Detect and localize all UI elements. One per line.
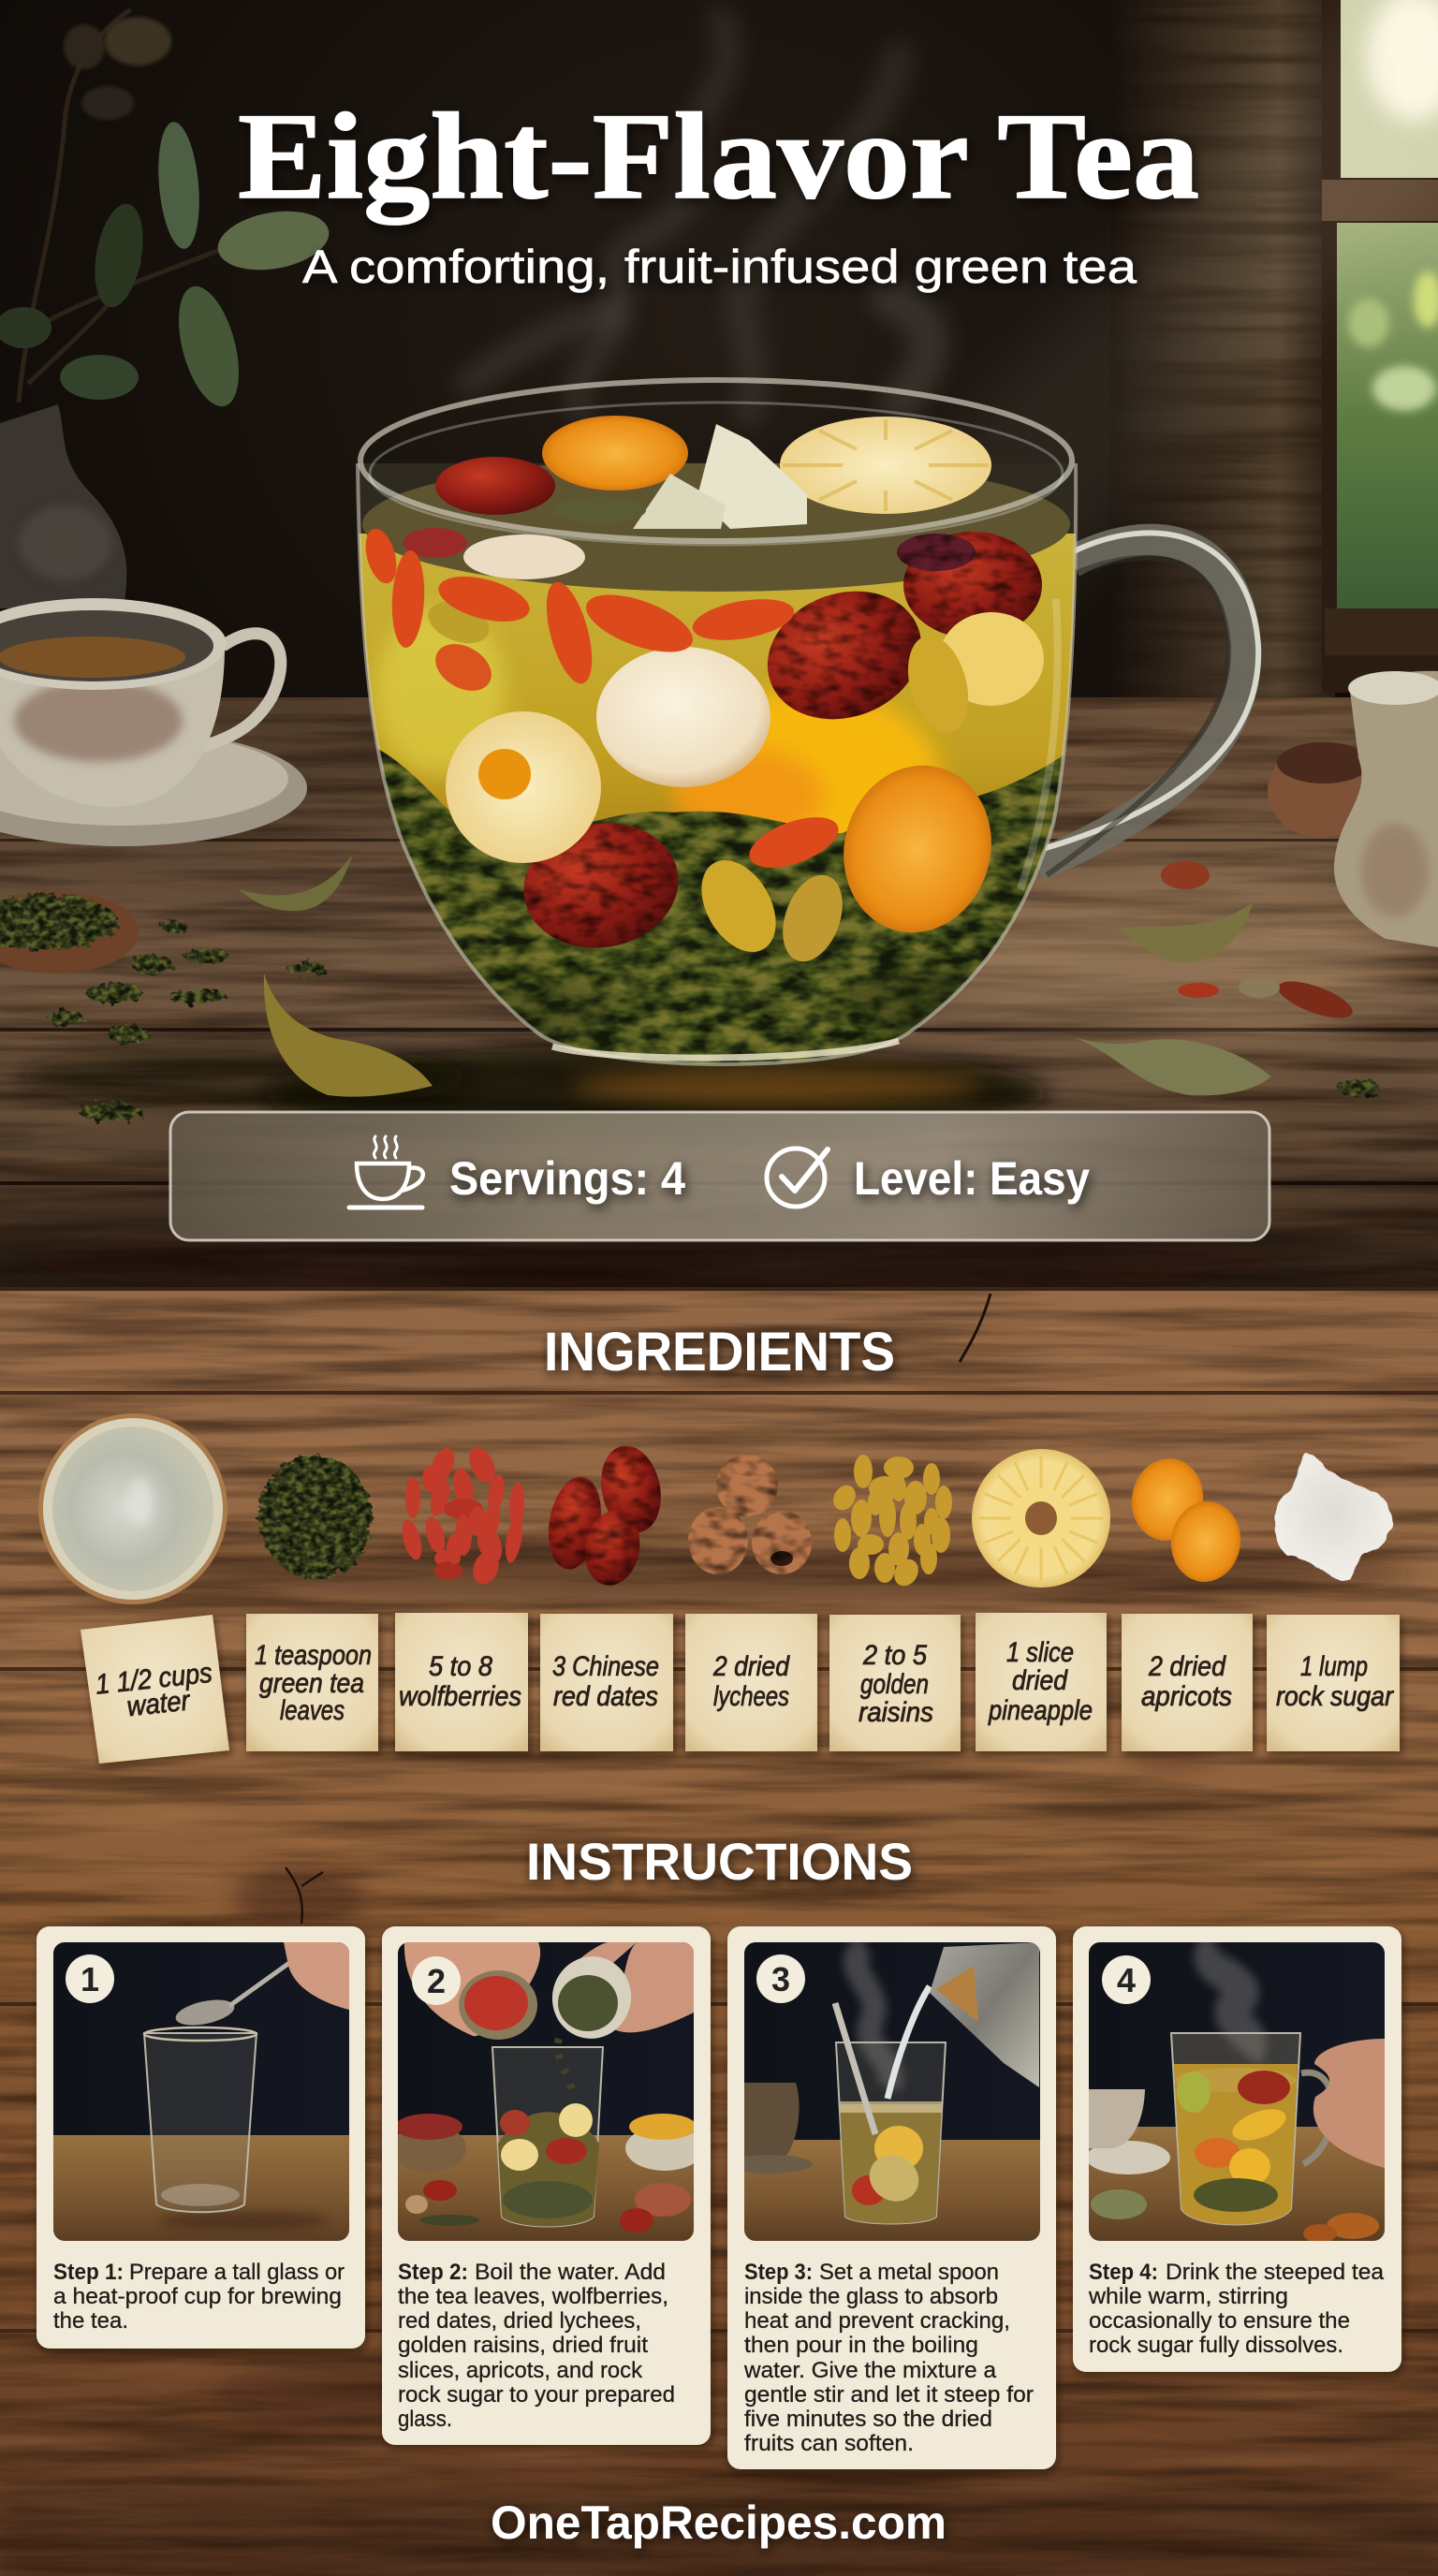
panel: step 1 — [37, 1926, 365, 2349]
wood lower background — [0, 1287, 1438, 2576]
servings and level panel — [170, 1112, 1269, 1240]
step 1 text: Prepare a tall glass or — [129, 2260, 345, 2285]
wolfberries — [360, 525, 845, 878]
step 4 text: Step 4: — [1089, 2260, 1158, 2285]
note labels — [94, 1637, 1394, 1728]
apricot — [825, 749, 1010, 949]
teacup on saucer — [0, 598, 307, 846]
note labels: apricots — [1141, 1681, 1232, 1712]
step 2 text: Boil the water. Add — [475, 2260, 666, 2285]
step 2 number — [412, 1956, 461, 2005]
step 4 text: occasionally to ensure the — [1089, 2308, 1350, 2334]
note labels: raisins — [858, 1697, 933, 1728]
ingredient row — [38, 1413, 1414, 1604]
step 4 text — [1088, 2260, 1385, 2358]
green tea leaves — [259, 1456, 372, 1579]
step 2 text: the tea leaves, wolfberries, — [398, 2284, 668, 2309]
cup body and tea — [358, 463, 1076, 1064]
note: lychees — [685, 1614, 817, 1751]
lychees — [446, 612, 1044, 863]
servings label: Servings: 4 — [449, 1152, 685, 1205]
step 1 number — [66, 1954, 114, 2003]
note labels: 1 1/2 cups — [94, 1658, 213, 1701]
step 2 text: rock sugar to your prepared — [398, 2382, 675, 2408]
golden raisins — [422, 594, 978, 970]
note labels: dried — [1012, 1665, 1068, 1696]
step 3 text: Step 3: — [744, 2260, 813, 2285]
step 3 text: five minutes so the dried — [744, 2407, 992, 2432]
panel: step 2 — [382, 1926, 711, 2445]
wolfberries — [399, 1443, 525, 1588]
step 2 text: slices, apricots, and rock — [398, 2358, 643, 2383]
floating top fruit — [404, 416, 991, 579]
hero glass cup of tea — [346, 374, 1258, 1076]
step 1 number: 1 — [81, 1960, 99, 1998]
note: wolfberries — [395, 1613, 528, 1751]
title: Eight-Flavor Tea — [238, 87, 1199, 225]
shadows under ingredients — [66, 1544, 1414, 1601]
step 2 text: glass. — [398, 2407, 452, 2432]
golden raisins — [829, 1455, 952, 1590]
red dates — [514, 532, 1042, 959]
note labels: 2 dried — [1148, 1651, 1226, 1682]
step 3 photo — [723, 1942, 1040, 2241]
note labels: lychees — [713, 1681, 789, 1712]
step 2 text — [398, 2260, 675, 2432]
note labels: golden — [860, 1669, 929, 1700]
note labels: 5 to 8 — [429, 1651, 492, 1682]
step 2 number: 2 — [427, 1962, 446, 2000]
step 1 text: the tea. — [53, 2308, 128, 2334]
note: apricots — [1122, 1614, 1253, 1751]
step 1 photo — [53, 1942, 349, 2241]
note labels: rock sugar — [1276, 1681, 1394, 1712]
hero scene background — [0, 0, 1438, 1296]
note labels: wolfberries — [399, 1681, 521, 1712]
step 3 text: Set a metal spoon — [819, 2260, 999, 2285]
note: rock sugar — [1267, 1615, 1400, 1751]
step 3 text: gentle stir and let it steep for — [744, 2382, 1034, 2408]
step 1 text: a heat-proof cup for brewing — [53, 2284, 342, 2309]
step 2 photo — [391, 1942, 704, 2241]
step 4 number — [1102, 1955, 1151, 2004]
step 4 number: 4 — [1117, 1961, 1136, 1999]
level label: Level: Easy — [854, 1152, 1090, 1205]
glass rim and highlights — [358, 380, 1076, 1064]
note labels: 1 slice — [1006, 1637, 1074, 1668]
step 4 text: rock sugar fully dissolves. — [1089, 2333, 1343, 2358]
icon: check mark — [767, 1149, 828, 1207]
note: pineapple — [976, 1613, 1107, 1751]
water bowl — [38, 1413, 227, 1604]
subtitle: A comforting, fruit-infused green tea — [302, 241, 1137, 293]
rock sugar — [1275, 1454, 1391, 1580]
note labels: green tea — [259, 1668, 364, 1699]
steam — [468, 19, 929, 412]
step 3 text: fruits can soften. — [744, 2431, 914, 2456]
panel: step 4 — [1073, 1926, 1401, 2372]
red dates — [542, 1441, 668, 1589]
step 4 text: while warm, stirring — [1088, 2284, 1288, 2309]
plant and vase — [0, 9, 333, 608]
step 4 photo — [1086, 1942, 1385, 2243]
scattered dried tea leaves — [46, 921, 1379, 1121]
ingredients heading: INGREDIENTS — [544, 1322, 895, 1383]
step 3 number — [756, 1954, 805, 2003]
note labels: 3 Chinese — [552, 1651, 659, 1682]
step 2 text: Step 2: — [398, 2260, 468, 2285]
footer website: OneTapRecipes.com — [491, 2496, 946, 2549]
step 2 text: red dates, dried lychees, — [398, 2308, 641, 2334]
dried lychees — [688, 1455, 812, 1574]
note labels: 2 dried — [712, 1651, 790, 1682]
right side bowl and pitcher — [1268, 671, 1438, 947]
step 3 number: 3 — [771, 1960, 790, 1998]
step 3 text — [743, 2260, 1034, 2456]
note labels: leaves — [280, 1695, 345, 1726]
step 3 text: water. Give the mixture a — [743, 2358, 997, 2383]
dried apricots — [1125, 1453, 1246, 1587]
step 3 text: heat and prevent cracking, — [744, 2308, 1010, 2334]
note labels: 2 to 5 — [862, 1640, 927, 1671]
step 4 text: Drink the steeped tea — [1166, 2260, 1385, 2285]
note labels: red dates — [553, 1681, 658, 1712]
step 1 text — [53, 2260, 345, 2334]
step 3 text: inside the glass to absorb — [744, 2284, 998, 2309]
step 1 text: Step 1: — [53, 2260, 124, 2285]
note labels: 1 teaspoon — [255, 1640, 372, 1671]
note labels: 1 lump — [1300, 1651, 1368, 1682]
step 2 text: golden raisins, dried fruit — [398, 2333, 648, 2358]
note: dates — [540, 1614, 673, 1751]
note: raisins — [829, 1615, 961, 1751]
scattered leaves on table — [239, 854, 1357, 1097]
note: water — [81, 1615, 229, 1764]
note labels: pineapple — [988, 1695, 1093, 1726]
panel: step 3 — [723, 1926, 1056, 2469]
note labels: water — [125, 1685, 192, 1722]
cup handle — [1037, 533, 1258, 875]
instructions heading: INSTRUCTIONS — [526, 1832, 913, 1891]
icon: steaming cup — [349, 1136, 423, 1208]
note: tea leaves — [246, 1614, 378, 1751]
step 3 text: then pour in the boiling — [744, 2333, 978, 2358]
pineapple ring — [972, 1449, 1110, 1588]
ingredient note cards — [81, 1613, 1400, 1764]
small dish of tea leaves — [0, 891, 139, 973]
